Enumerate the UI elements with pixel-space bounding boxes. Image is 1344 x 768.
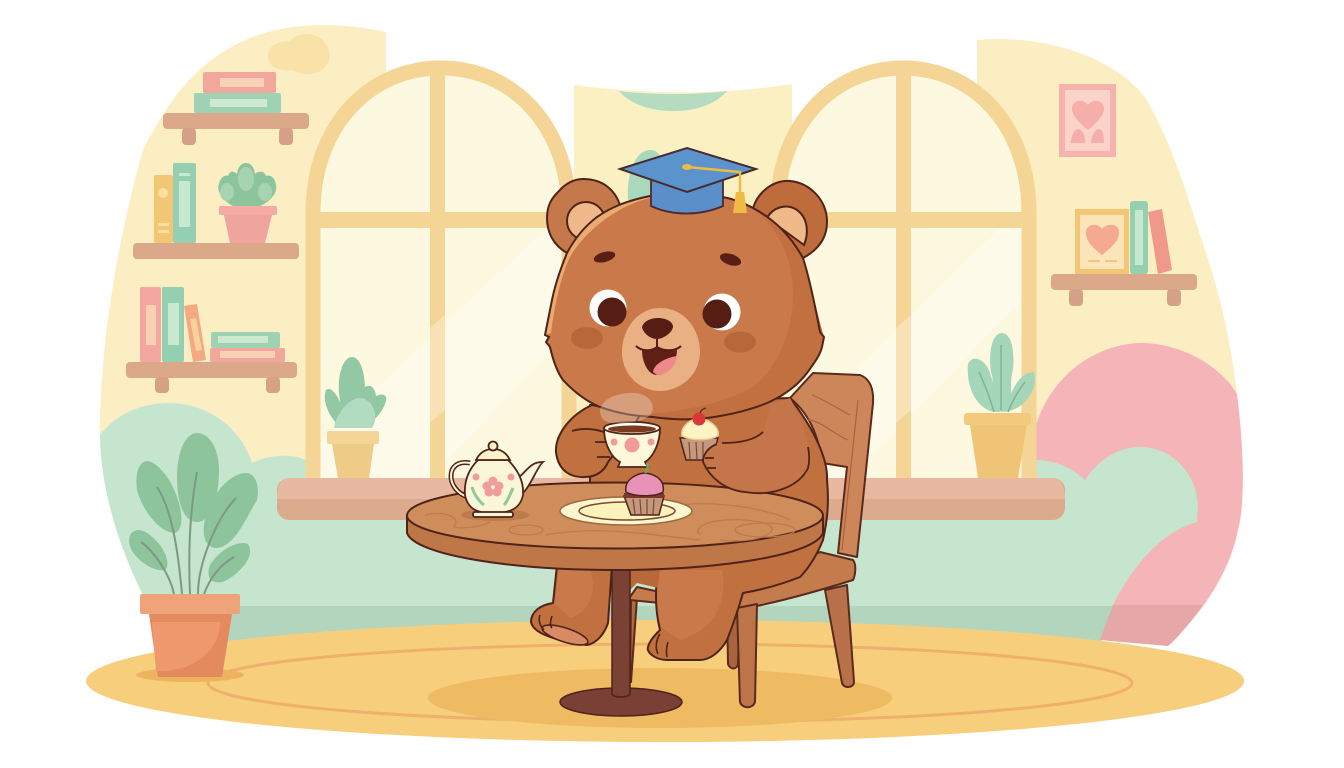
left inner ear xyxy=(567,202,605,240)
seat sliver xyxy=(630,587,660,603)
head outline xyxy=(545,196,824,419)
books stack xyxy=(194,72,281,113)
held cupcake xyxy=(680,408,718,460)
wrapper xyxy=(624,496,664,515)
window glass xyxy=(313,68,569,478)
pink mound xyxy=(1036,343,1243,646)
banner green arc xyxy=(619,91,727,111)
back grain xyxy=(808,395,858,550)
window light beam xyxy=(785,228,1022,478)
window frame xyxy=(313,68,569,478)
leaves xyxy=(325,357,386,428)
frosting xyxy=(626,473,663,496)
books xyxy=(140,287,285,362)
window sill xyxy=(277,478,1065,520)
sun smudge xyxy=(268,34,330,74)
tassel button xyxy=(682,164,692,170)
leaves xyxy=(968,333,1035,412)
shelf: lower left xyxy=(126,287,297,393)
toe lines xyxy=(656,634,668,657)
window: left xyxy=(313,68,569,478)
rug base xyxy=(86,620,1244,742)
right cheek xyxy=(724,332,756,352)
right eye xyxy=(702,294,740,330)
leaves xyxy=(129,433,258,582)
chair back xyxy=(790,373,873,557)
picture frame: hearts xyxy=(1059,84,1116,157)
shelf: middle left xyxy=(133,163,299,259)
left toe lines xyxy=(539,615,552,630)
tongue xyxy=(653,356,677,375)
background plant behind cap xyxy=(628,150,666,200)
table xyxy=(407,482,823,716)
left leg xyxy=(531,565,612,645)
cap base xyxy=(651,180,723,214)
shadow between legs xyxy=(612,565,660,590)
wall: centre banner xyxy=(574,84,792,480)
steam xyxy=(600,393,653,423)
pot body xyxy=(465,460,523,513)
head left rim light xyxy=(545,196,650,335)
pot xyxy=(332,444,374,478)
right thigh highlight xyxy=(657,570,723,640)
handle xyxy=(451,462,470,497)
cup flower xyxy=(624,438,640,452)
cap board xyxy=(620,148,756,192)
wrapper xyxy=(680,438,718,460)
teacup xyxy=(604,422,660,467)
right back leg xyxy=(825,585,854,687)
stems xyxy=(141,472,236,594)
wrapper pleats xyxy=(633,499,654,514)
picture frame: heart xyxy=(1075,209,1129,274)
transom xyxy=(313,212,569,228)
books xyxy=(1130,201,1172,274)
left leg highlight xyxy=(555,570,593,618)
right inner ear xyxy=(767,207,807,245)
floor shadow band xyxy=(200,606,1113,645)
shelf board xyxy=(126,362,297,378)
pedestal xyxy=(612,565,630,697)
window glass xyxy=(777,68,1029,478)
shelf board xyxy=(133,243,299,259)
pot xyxy=(970,425,1027,478)
pot highlight xyxy=(152,622,220,671)
arm outline xyxy=(703,432,809,493)
tea xyxy=(608,426,656,432)
beam over mullion xyxy=(430,315,445,423)
lid xyxy=(476,449,510,460)
pot xyxy=(149,614,232,677)
right eyebrow xyxy=(718,251,743,268)
right ear xyxy=(753,181,827,258)
left cheek xyxy=(571,327,603,349)
green mound xyxy=(1036,447,1198,640)
rug xyxy=(86,620,1244,742)
plate xyxy=(560,497,692,525)
mouth xyxy=(642,347,677,375)
wrapper pleats xyxy=(689,442,703,459)
table top xyxy=(407,482,823,548)
table edge xyxy=(407,516,823,570)
mullion xyxy=(896,68,911,478)
handle inner xyxy=(451,462,470,497)
teapot xyxy=(451,442,543,521)
teapot leaves xyxy=(472,487,513,505)
cherry stem xyxy=(700,408,706,413)
plant: left window xyxy=(325,357,386,478)
plant: floor xyxy=(129,433,258,682)
frosting xyxy=(682,418,718,440)
body xyxy=(590,398,828,660)
sill highlight xyxy=(277,478,1065,499)
arm fill xyxy=(703,398,809,493)
tassel xyxy=(687,167,740,193)
books xyxy=(154,163,196,243)
spout xyxy=(518,462,543,497)
left ear xyxy=(547,179,620,253)
shelf board xyxy=(163,113,309,129)
beam over mullion xyxy=(896,315,911,423)
rear left leg xyxy=(727,610,740,668)
tassel end xyxy=(733,192,747,213)
knob xyxy=(488,442,498,450)
teapot shadow xyxy=(461,509,529,521)
cup rim xyxy=(604,422,660,434)
plant: right window xyxy=(964,333,1035,478)
graduation cap xyxy=(620,148,756,214)
muzzle xyxy=(622,308,700,391)
cupcake on plate xyxy=(624,463,664,515)
nose xyxy=(642,318,673,339)
foot xyxy=(473,512,513,517)
window: right xyxy=(777,68,1029,478)
transom xyxy=(777,212,1029,228)
left foot pad xyxy=(540,621,590,649)
green wall band xyxy=(100,403,1036,640)
rear centre leg xyxy=(630,598,637,682)
rug inner ring xyxy=(208,644,1132,722)
pot rim xyxy=(140,594,240,614)
chair xyxy=(630,373,873,707)
shelf: right xyxy=(1051,201,1197,306)
window frame xyxy=(777,68,1029,478)
head xyxy=(545,196,824,419)
left arm xyxy=(556,405,640,477)
rug centre xyxy=(428,668,892,728)
wall: right yellow shape xyxy=(977,39,1237,480)
mullion xyxy=(430,68,445,478)
window light beam xyxy=(320,228,562,478)
flower xyxy=(472,474,514,496)
pink mound lower shade xyxy=(1100,605,1203,646)
smile lines xyxy=(636,339,681,350)
cup body xyxy=(604,428,660,467)
left eye xyxy=(590,290,626,326)
pot shadow xyxy=(136,668,244,682)
bear xyxy=(531,179,828,660)
wall: left yellow shape xyxy=(100,25,386,480)
left eyebrow xyxy=(593,249,616,265)
cherry xyxy=(692,412,706,426)
wood grain xyxy=(425,504,795,558)
left paw fingers xyxy=(572,429,610,457)
head right shading xyxy=(637,208,824,419)
pedestal base xyxy=(560,688,682,716)
cup side flowers xyxy=(610,438,618,446)
potted plant xyxy=(218,163,277,243)
seat xyxy=(737,552,855,610)
right arm xyxy=(703,398,809,493)
stem xyxy=(645,463,648,473)
front leg xyxy=(737,604,757,707)
shelf: top left xyxy=(163,72,309,145)
cake band xyxy=(624,493,664,498)
shelf board xyxy=(1051,274,1197,290)
